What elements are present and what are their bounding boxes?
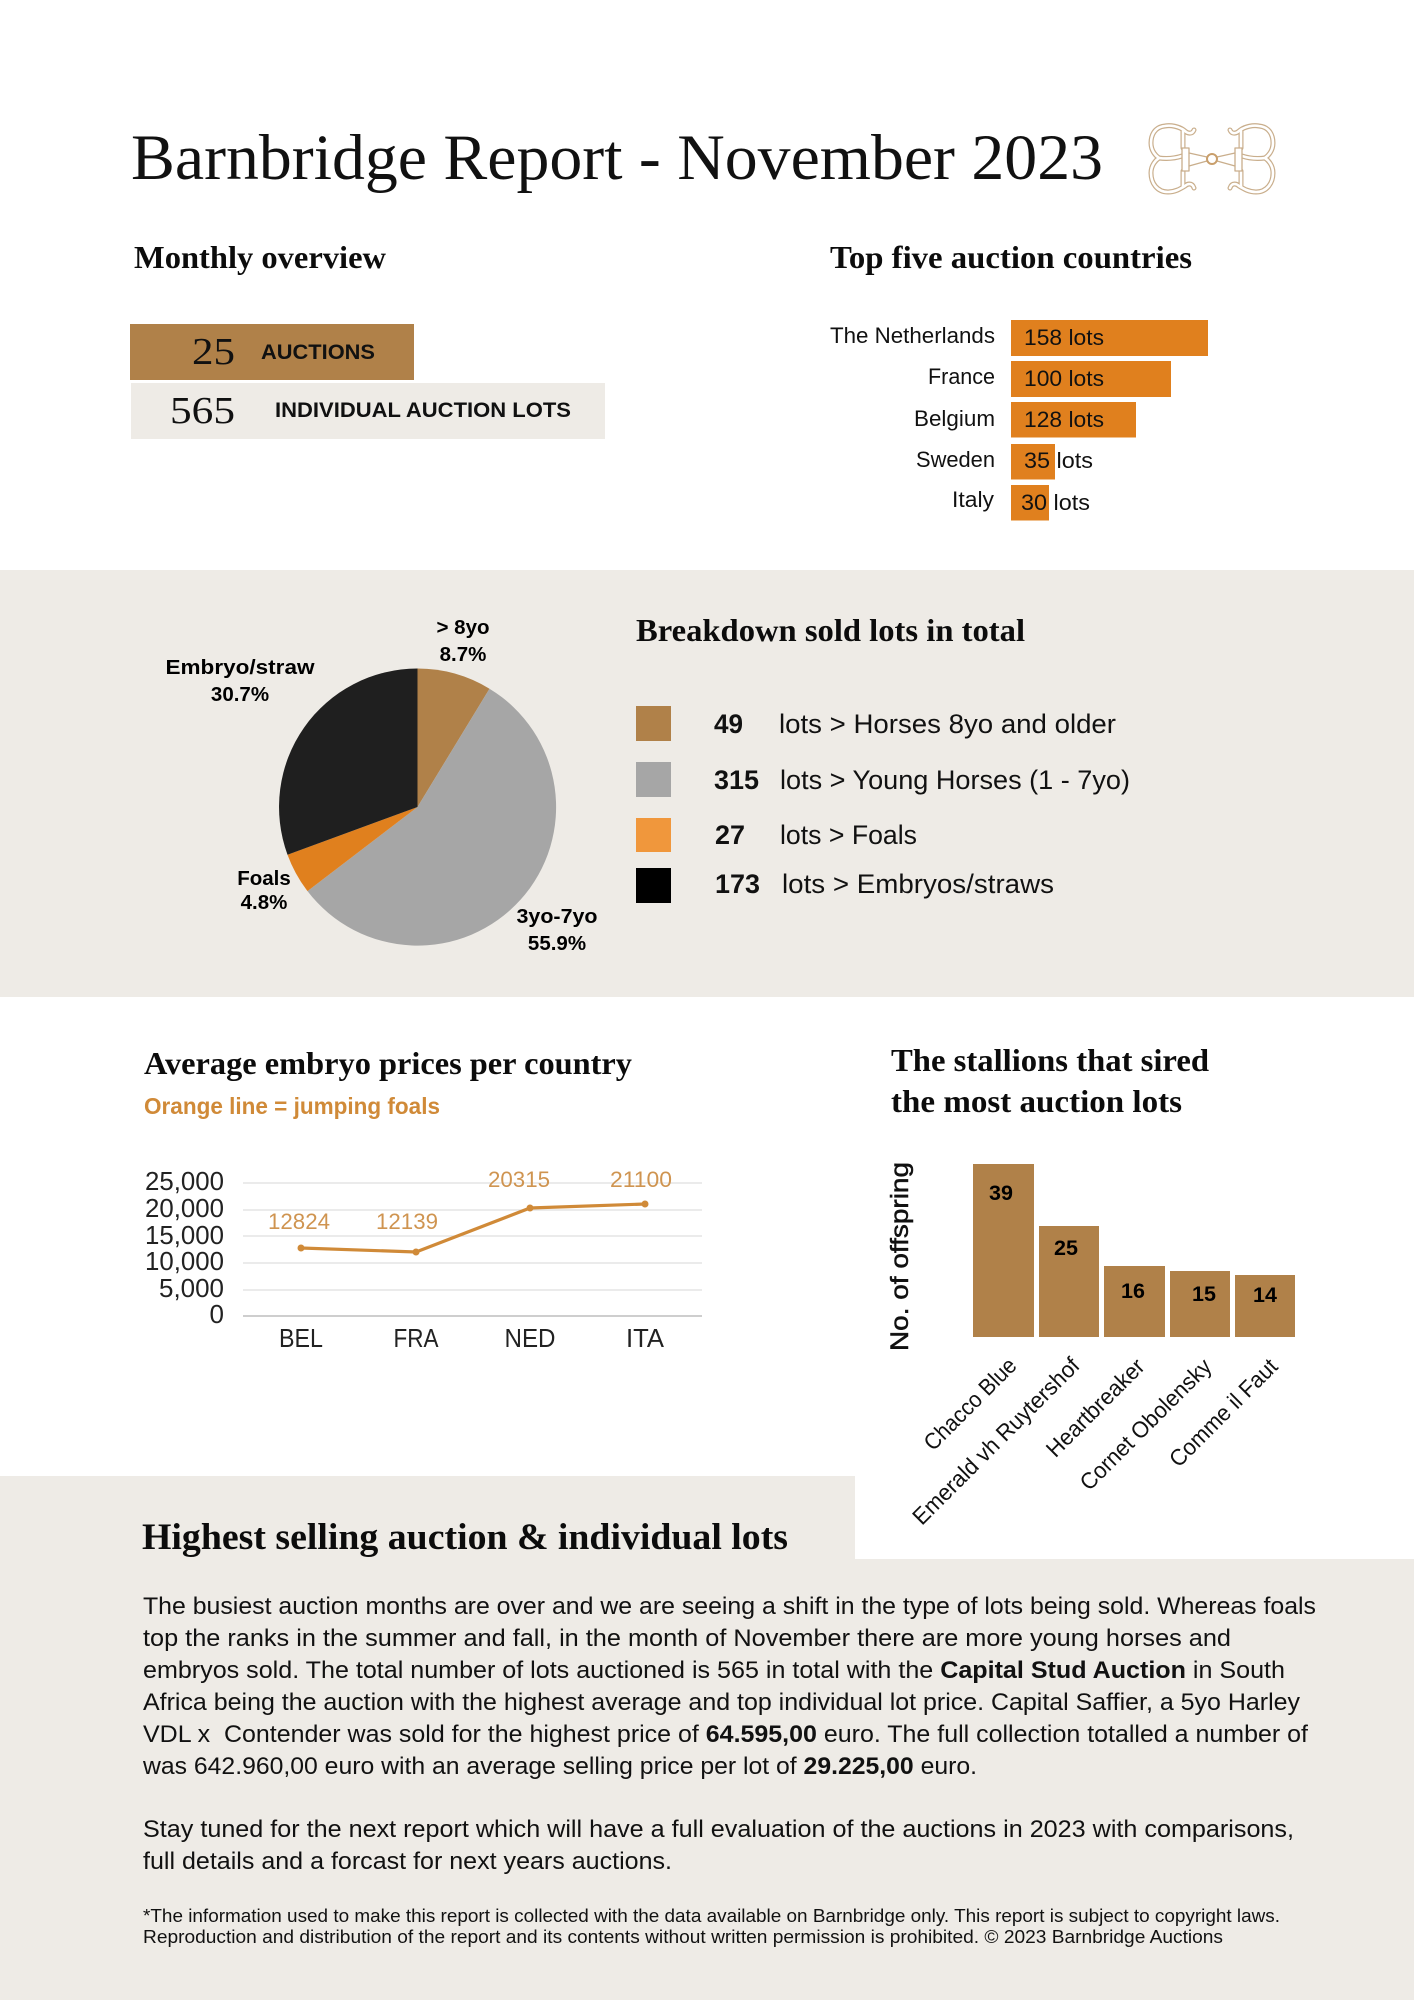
bar chart: stallions offspring: No. of offspring bbox=[886, 1162, 914, 1351]
line chart: embryo prices: ITA bbox=[626, 1323, 665, 1353]
legend: young horses bbox=[636, 762, 1130, 797]
legend: embryos/straws: 173 bbox=[715, 869, 760, 899]
text block: summary paragraph: Africa being the auction with the highest average and top individual lot price. Capital Saffier, a 5yo Harley bbox=[143, 1689, 1301, 1716]
heading: average embryo prices per country: Average embryo prices per country bbox=[144, 1045, 632, 1081]
bar chart: top five auction countries: 30 lots bbox=[1021, 490, 1090, 515]
title: Barnbridge Report - November 2023 bbox=[131, 122, 1103, 194]
text block: summary paragraph: was 642.960,00 euro with an average selling price per lot of 29.225,00 euro. bbox=[142, 1753, 977, 1780]
text block: next report note: full details and a forcast for next years auctions. bbox=[143, 1848, 672, 1875]
pie label: embryo/straw: Embryo/straw bbox=[166, 656, 315, 679]
pie label: over 8yo bbox=[436, 616, 490, 666]
footnote: *The information used to make this report is collected with the data available on Barnbridge only. This report is subject to copyright laws. bbox=[143, 1906, 1280, 1926]
pie label: foals bbox=[237, 867, 291, 914]
bar chart: stallions offspring: Emerald vh Ruytershof bbox=[907, 1352, 1085, 1530]
bar chart: stallions offspring: Comme il Faut bbox=[1164, 1353, 1283, 1472]
legend: foals bbox=[636, 818, 917, 852]
heading: stallions that sired the most auction lots: The stallions that sired bbox=[891, 1042, 1209, 1078]
line chart: embryo prices: 5,000 bbox=[159, 1273, 224, 1303]
text block: next report note: Stay tuned for the next report which will have a full evaluation of the auctions in 2023 with comparisons, bbox=[143, 1816, 1294, 1843]
legend: young horses: 315 bbox=[714, 765, 759, 795]
legend: horses 8yo and older bbox=[636, 706, 1116, 741]
line chart: embryo prices: 20,000 bbox=[145, 1193, 224, 1223]
icon: snaffle bit logo bbox=[1151, 126, 1273, 192]
bar chart: stallions offspring: Chacco Blue bbox=[918, 1352, 1022, 1455]
pie label: foals: 4.8% bbox=[241, 891, 287, 914]
text block: summary paragraph: The busiest auction months are over and we are seeing a shift in the type of lots being sold. Whereas foals bbox=[143, 1593, 1316, 1620]
bar chart: stallions offspring: 16 bbox=[1121, 1279, 1145, 1303]
line chart: embryo prices: 20315 bbox=[488, 1167, 550, 1192]
text block: summary paragraph: VDL x Contender was sold for the highest price of 64.595,00 euro. The full collection totalled a number of bbox=[143, 1721, 1308, 1748]
legend: horses 8yo and older: 49 bbox=[714, 709, 743, 739]
heading: top five auction countries: Top five auction countries bbox=[830, 239, 1192, 275]
legend: horses 8yo and older: lots > Horses 8yo and older bbox=[779, 709, 1116, 739]
bar chart: stallions offspring: 25 bbox=[1054, 1236, 1078, 1260]
legend: foals: lots > Foals bbox=[780, 820, 917, 850]
stat: 565 individual auction lots: 565 bbox=[170, 390, 235, 432]
line chart: embryo prices: 21100 bbox=[610, 1167, 672, 1192]
bar chart: top five auction countries: 158 lots bbox=[1024, 325, 1104, 350]
bar chart: top five auction countries: 128 lots bbox=[1024, 407, 1104, 432]
pie label: 3yo-7yo bbox=[516, 905, 598, 955]
bar chart: stallions offspring: Cornet Obolensky bbox=[1074, 1353, 1217, 1495]
stat: 25 auctions bbox=[130, 324, 414, 380]
pie label: 3yo-7yo: 3yo-7yo bbox=[516, 905, 598, 928]
heading: stallions that sired the most auction lots bbox=[891, 1042, 1209, 1119]
bar chart: stallions offspring: 14 bbox=[1253, 1283, 1277, 1307]
bar chart: top five auction countries: France bbox=[928, 364, 995, 389]
line chart: embryo prices: BEL bbox=[279, 1323, 323, 1353]
bar chart: top five auction countries: Sweden bbox=[916, 447, 995, 472]
subtitle: orange line note: Orange line = jumping foals bbox=[144, 1093, 440, 1119]
legend: young horses: lots > Young Horses (1 - 7yo) bbox=[780, 765, 1130, 795]
legend: embryos/straws: lots > Embryos/straws bbox=[782, 869, 1054, 899]
bar chart: top five auction countries: Belgium bbox=[914, 406, 995, 431]
bar chart: stallions offspring: 15 bbox=[1192, 1282, 1216, 1306]
pie label: over 8yo: 8.7% bbox=[440, 643, 486, 666]
bar chart: top five auction countries: Italy bbox=[952, 487, 994, 512]
pie label: foals: Foals bbox=[237, 867, 291, 890]
stat: 565 individual auction lots bbox=[131, 383, 605, 439]
line chart: embryo prices: NED bbox=[504, 1323, 556, 1353]
bar chart: top five auction countries: 100 lots bbox=[1024, 366, 1104, 391]
legend: foals: 27 bbox=[715, 820, 745, 850]
line chart: embryo prices: 12824 bbox=[268, 1209, 330, 1234]
line chart: embryo prices: 10,000 bbox=[145, 1246, 224, 1276]
bar chart: stallions offspring bbox=[886, 1162, 1295, 1530]
text block: next report note bbox=[143, 1816, 1294, 1875]
heading: stallions that sired the most auction lots: the most auction lots bbox=[891, 1083, 1182, 1119]
line chart: embryo prices: 15,000 bbox=[145, 1220, 224, 1250]
footnote: Reproduction and distribution of the report and its contents without written permission is prohibited. © 2023 Barnbridge Auctions bbox=[143, 1927, 1223, 1947]
text block: summary paragraph: top the ranks in the summer and fall, in the month of November there are more young horses and bbox=[143, 1625, 1231, 1652]
stat: 565 individual auction lots: INDIVIDUAL AUCTION LOTS bbox=[275, 398, 571, 422]
line chart: embryo prices: 0 bbox=[210, 1299, 224, 1329]
pie label: embryo/straw: 30.7% bbox=[211, 683, 269, 706]
pie label: over 8yo: > 8yo bbox=[436, 616, 490, 639]
footnote bbox=[143, 1906, 1280, 1947]
stat: 25 auctions: AUCTIONS bbox=[261, 340, 375, 364]
bar chart: stallions offspring: 39 bbox=[989, 1181, 1013, 1205]
panel: highest selling auction background and text bbox=[0, 1476, 1414, 2000]
text block: summary paragraph bbox=[142, 1593, 1316, 1780]
text block: summary paragraph: embryos sold. The total number of lots auctioned is 565 in total with the Capital Stud Auction in South bbox=[143, 1657, 1285, 1684]
line chart: embryo prices: FRA bbox=[394, 1323, 439, 1353]
bar chart: stallions offspring: Heartbreaker bbox=[1041, 1353, 1150, 1462]
legend: embryos/straws bbox=[636, 868, 1054, 903]
heading: monthly overview: Monthly overview bbox=[134, 239, 386, 275]
pie label: 3yo-7yo: 55.9% bbox=[528, 932, 586, 955]
heading: breakdown sold lots in total: Breakdown sold lots in total bbox=[636, 612, 1025, 648]
stat: 25 auctions: 25 bbox=[192, 331, 235, 373]
panel: breakdown sold lots bbox=[0, 570, 1414, 997]
bar chart: top five auction countries: 35 lots bbox=[1024, 448, 1093, 473]
pie chart: lots by age group bbox=[279, 668, 556, 946]
pie label: embryo/straw bbox=[166, 656, 315, 706]
heading: highest selling auction and individual lots: Highest selling auction & individual lots bbox=[142, 1517, 788, 1558]
bar chart: top five auction countries bbox=[830, 320, 1208, 520]
line chart: embryo prices: 12139 bbox=[376, 1209, 438, 1234]
line chart: embryo prices: 25,000 bbox=[145, 1166, 224, 1196]
bar chart: top five auction countries: The Netherlands bbox=[830, 323, 995, 348]
line chart: embryo prices bbox=[145, 1166, 702, 1353]
